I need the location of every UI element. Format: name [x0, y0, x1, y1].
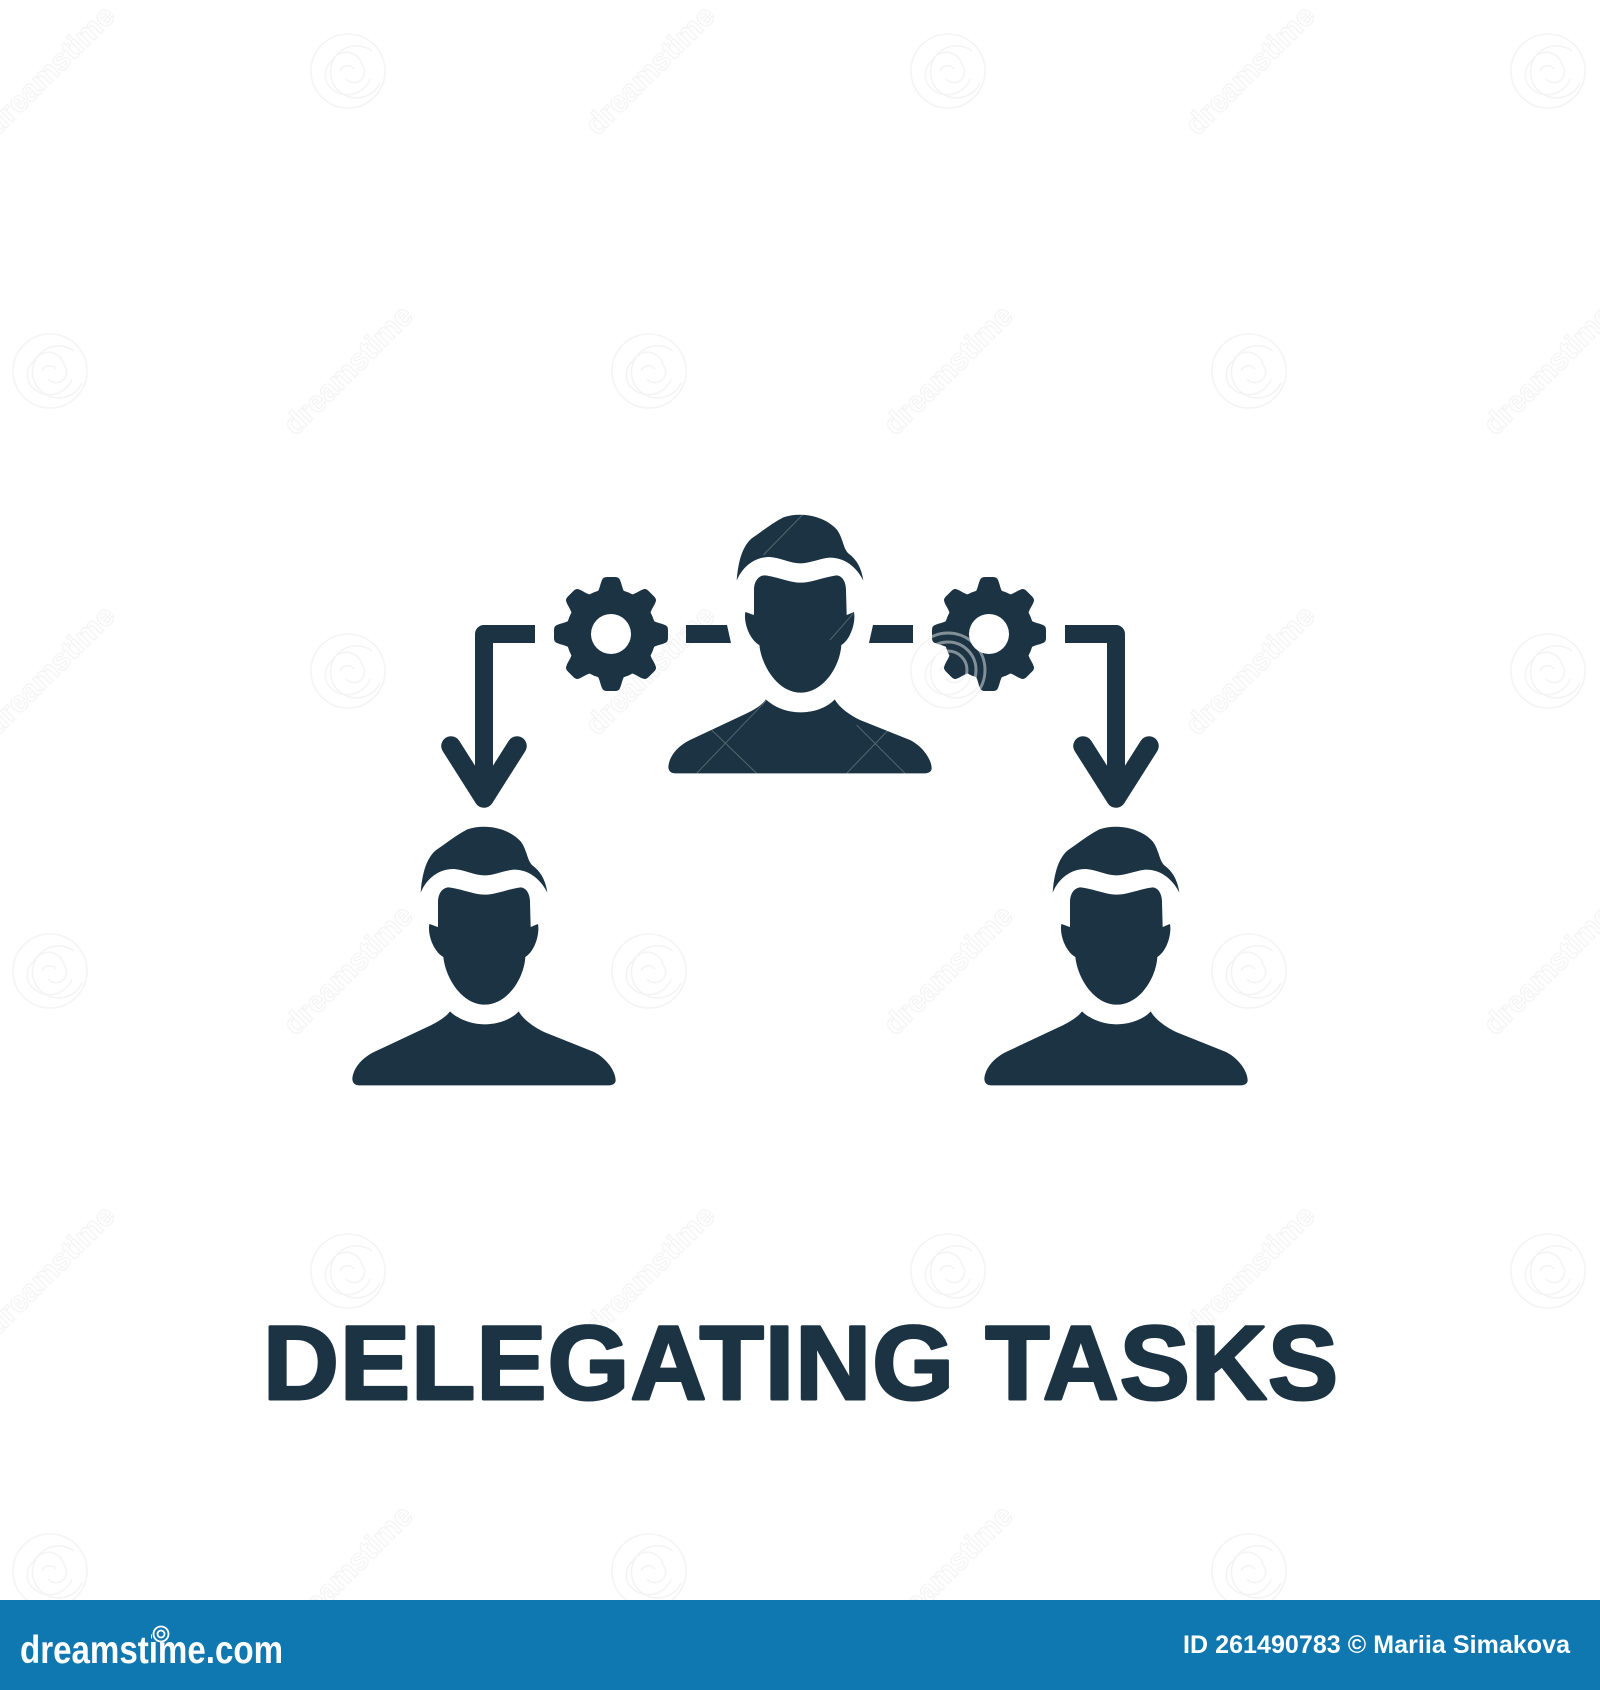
watermark pattern: dreamstime [277, 1499, 420, 1642]
icon: delegating tasks diagram [352, 515, 1248, 1085]
footer logo: dreamstime.com: dreamstime.com [20, 1629, 283, 1672]
title: DELEGATING TASKS [263, 1305, 1338, 1422]
footer credit: image ID and author: ID 261490783 © Mariia Simakova [1183, 1631, 1571, 1659]
icon: top manager person [668, 515, 932, 773]
watermark pattern: dreamstime [1179, 0, 1322, 142]
watermark pattern: dreamstime [579, 599, 722, 742]
watermark pattern: dreamstime [579, 1199, 722, 1342]
icon: right gear [932, 577, 1046, 691]
watermark pattern: dreamstime [877, 1499, 1020, 1642]
watermark pattern: dreamstime [277, 899, 420, 1042]
footer bar [0, 1600, 1600, 1690]
arrow: down to right team member [1065, 634, 1149, 798]
connector: dash between manager and right gear [869, 625, 913, 643]
icon: right team member person [984, 827, 1248, 1085]
connector: dash between left gear and manager [686, 625, 731, 643]
watermark pattern: dreamstime [877, 899, 1020, 1042]
watermark pattern: dreamstime [1179, 1199, 1322, 1342]
arrow: down to left team member [451, 634, 535, 798]
watermark pattern: dreamstime [877, 299, 1020, 442]
watermark pattern: dreamstime [579, 0, 722, 142]
icon: left team member person [352, 827, 616, 1085]
icon: left gear [554, 577, 668, 691]
watermark pattern: dreamstime [1179, 599, 1322, 742]
watermark pattern: dreamstime [277, 299, 420, 442]
